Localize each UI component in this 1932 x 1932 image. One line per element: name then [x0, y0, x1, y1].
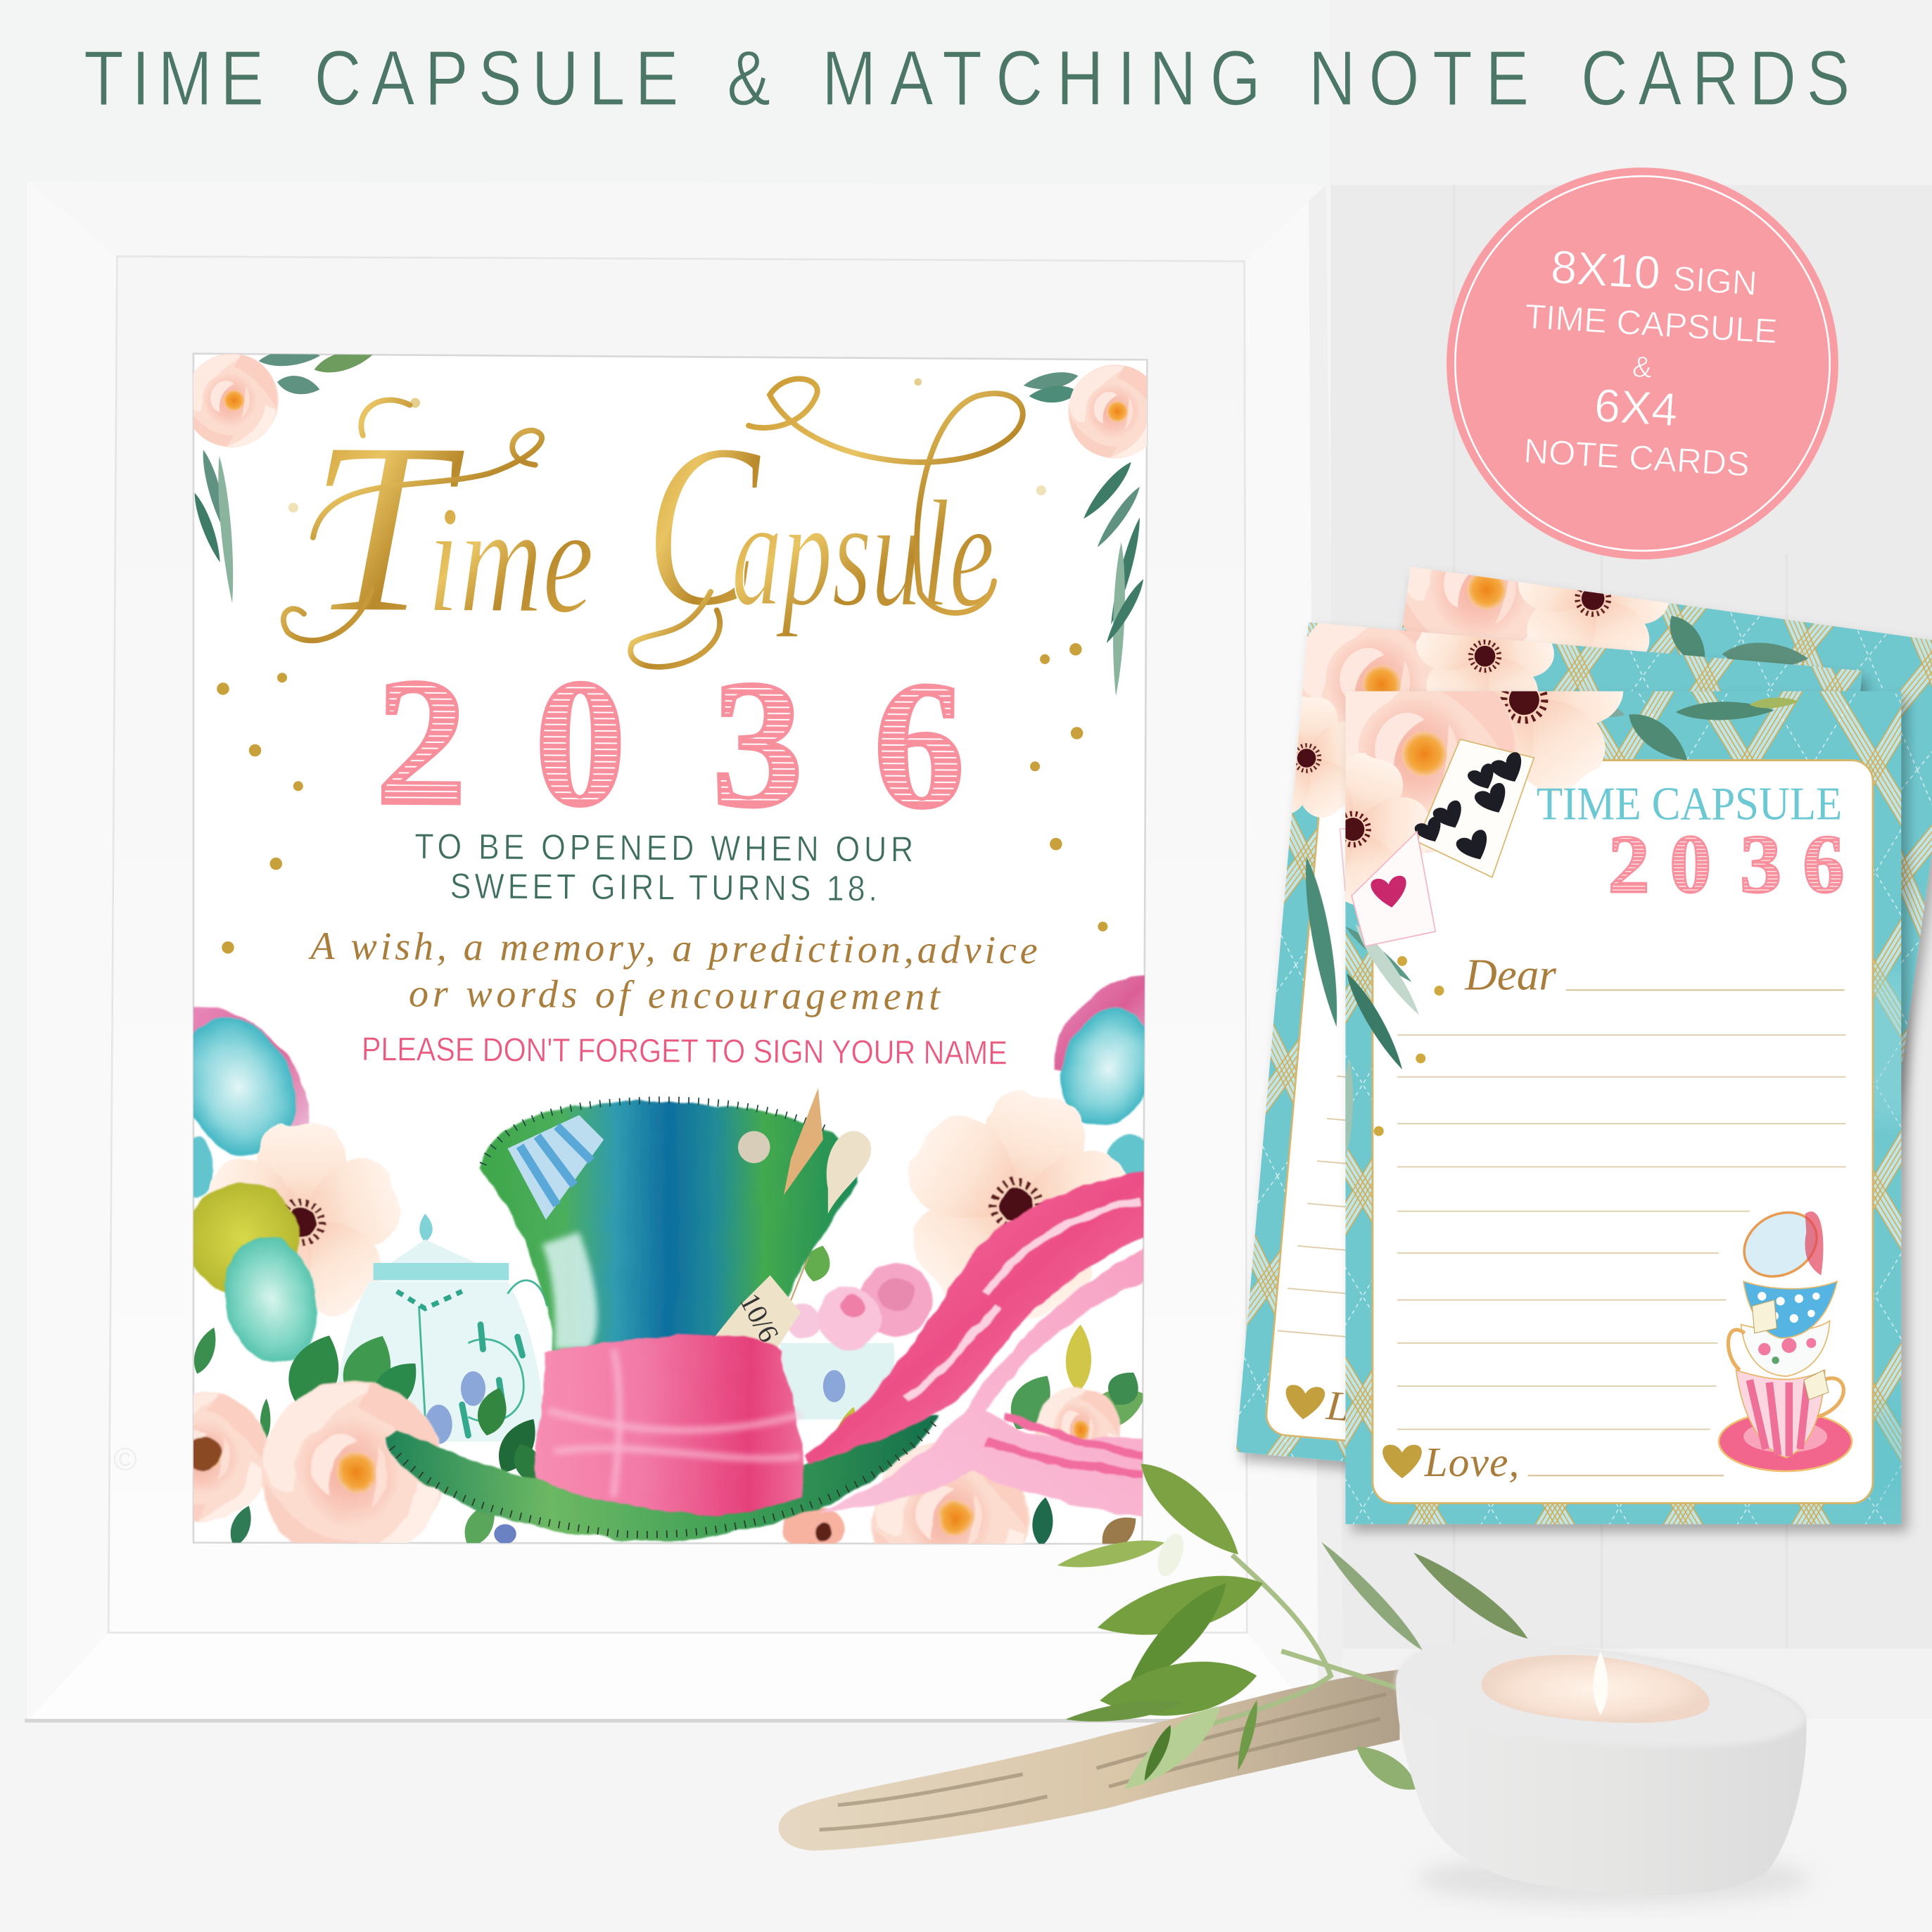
subtitle in green: TO BE OPENED WHEN OUR [414, 827, 913, 870]
pink year 2036 [375, 641, 965, 846]
olive leaves [1055, 1449, 1534, 1802]
card heading: TIME CAPSULE [1537, 779, 1842, 830]
pink roses [786, 1263, 933, 1349]
script heading: time capsule: ime [427, 474, 595, 646]
title: & [727, 34, 770, 122]
middle card sign-off [1283, 1378, 1421, 1436]
card year 2036: 2 [1608, 818, 1650, 910]
title: CARDS [1581, 34, 1850, 122]
teacup behind hat [780, 1343, 894, 1419]
top right floral corner [1023, 364, 1147, 697]
candle flame [1593, 1651, 1608, 1715]
card year 2036: 6 [1803, 818, 1845, 910]
mad hatter hat [384, 1088, 940, 1541]
subtitle in green: SWEET GIRL TURNS 18. [450, 867, 877, 909]
back card flowers [1385, 492, 1580, 687]
subtitle in green [414, 827, 913, 909]
gold italic instructions [307, 924, 1038, 1019]
middle card small playing card [1340, 824, 1401, 891]
crown stitches [483, 1100, 830, 1164]
teapot [333, 1214, 547, 1442]
badge text [1515, 240, 1782, 485]
pink year 2036: 3 [711, 643, 804, 846]
candle shadow [1417, 1855, 1811, 1904]
card gold dots [1374, 956, 1444, 1136]
badge text: 8X10 SIGN [1549, 241, 1759, 305]
pink reminder: PLEASE DON'T FORGET TO SIGN YOUR NAME [362, 1031, 1008, 1072]
branch stems [1183, 1555, 1399, 1731]
green foliage left [189, 1324, 547, 1489]
candle rim [1396, 1642, 1806, 1747]
badge text: 6X4 [1593, 379, 1679, 437]
light wash on crown [542, 1232, 597, 1349]
title: MATCHING [822, 34, 1261, 122]
pink striped cup [1736, 1370, 1843, 1458]
band highlights [548, 1349, 801, 1497]
badge text: TIME CAPSULE [1524, 298, 1779, 351]
teal mushroom [224, 1236, 319, 1364]
left anemone flower [208, 1123, 401, 1317]
badge text: & [1632, 350, 1653, 384]
10/6 price tag: 10/6 [734, 1288, 785, 1347]
brim stitching [392, 1423, 934, 1534]
hat brim [384, 1416, 940, 1541]
middle card writing lines [1278, 944, 1808, 1374]
card year 2036: 3 [1740, 818, 1781, 910]
hat pins [715, 1164, 828, 1349]
script heading: time capsule: apsule [731, 468, 995, 640]
card year 2036: 0 [1670, 818, 1712, 910]
script heading: time capsule: T [307, 390, 468, 665]
olive branch [1055, 1449, 1534, 1802]
love sign-off: Love, [1423, 1439, 1519, 1485]
title [84, 34, 1850, 122]
script heading: time capsule: C [645, 395, 763, 655]
pink badge [1447, 167, 1838, 559]
tilted white cup [1733, 1200, 1829, 1289]
poster artwork clipped to paper [193, 354, 1147, 1544]
top left floral corner [185, 345, 376, 604]
middle card flowers [1287, 593, 1468, 775]
card year 2036 [1608, 818, 1845, 910]
floral cup [1728, 1321, 1830, 1376]
gold flourishes [283, 376, 1023, 669]
right anemone flower [908, 1090, 1127, 1318]
hat pin heads [738, 1088, 871, 1214]
blue flowers [425, 1370, 845, 1544]
candle body [1396, 1642, 1807, 1895]
pink year 2036: 0 [534, 642, 627, 844]
middle card white panel [1265, 693, 1828, 1477]
poster text [281, 376, 1041, 1072]
left mushroom [193, 1006, 310, 1199]
concrete candle holder [1396, 1642, 1811, 1904]
front card top flowers and leaves [1247, 601, 1799, 1158]
playing card with black hearts [1413, 739, 1534, 877]
driftwood [778, 1670, 1399, 1850]
love sign-off [1383, 1439, 1724, 1485]
stacked teacups [1719, 1200, 1852, 1471]
pink ribbon [805, 1171, 1148, 1518]
poster: time capsule sign [193, 352, 1148, 1545]
green foliage right [800, 1243, 1153, 1469]
tea tags [1752, 1300, 1829, 1399]
hat crown [479, 1102, 859, 1353]
gold italic instructions: or words of encouragement [409, 972, 941, 1019]
title: NOTE [1309, 34, 1529, 122]
pink year 2036: 2 [375, 641, 468, 844]
writing lines [1397, 1035, 1845, 1429]
watercolor wash [1817, 974, 1932, 1504]
pink year 2036: 6 [873, 644, 965, 846]
candle wax [1482, 1655, 1710, 1723]
back note card [1283, 492, 1932, 1469]
title: TIME [84, 34, 264, 122]
yellow mushroom [186, 1181, 300, 1295]
saucer [1719, 1412, 1852, 1471]
striped patch [508, 1115, 604, 1220]
pink hat band [534, 1335, 804, 1516]
dark bottom leaves [225, 1496, 1143, 1556]
dear line: Dear [1464, 950, 1556, 999]
middle note card [1178, 567, 1867, 1501]
10/6 price tag [715, 1276, 801, 1349]
peonies bottom [141, 1381, 1120, 1597]
front card white panel [1373, 761, 1873, 1504]
gold confetti dots [217, 379, 1107, 953]
playing card with pink heart [1352, 832, 1435, 946]
white picture frame: © [113, 1441, 137, 1477]
middle card sign-off: Love, [1324, 1382, 1421, 1436]
title: CAPSULE [314, 34, 678, 122]
white picture frame [25, 181, 1343, 1722]
blue polka dot cup [1743, 1281, 1837, 1338]
front note card [1247, 601, 1932, 1524]
badge text: NOTE CARDS [1523, 432, 1750, 484]
gold italic instructions: A wish, a memory, a prediction,advice [307, 924, 1038, 972]
right mushroom [1053, 974, 1145, 1186]
script heading: time capsule [283, 376, 1023, 669]
